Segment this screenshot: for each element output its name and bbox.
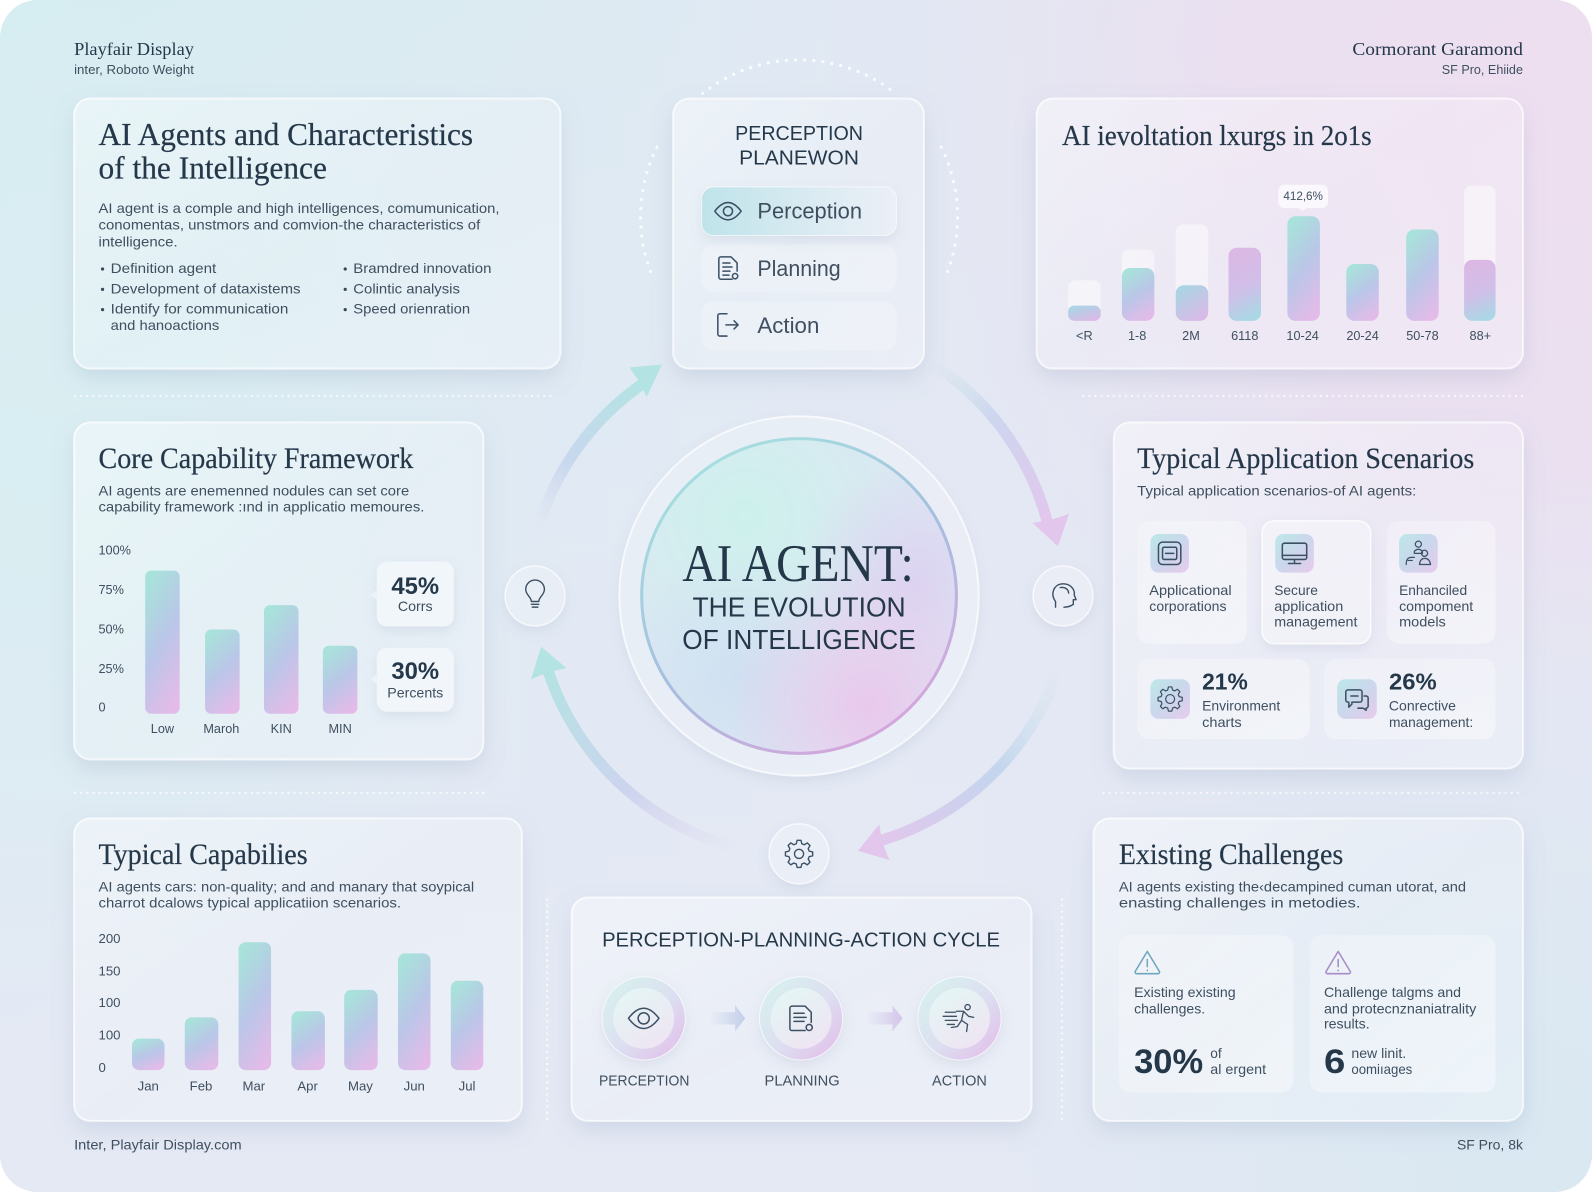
dotted ring behind top panel xyxy=(641,60,958,277)
bar chart: KIN xyxy=(271,722,292,736)
node: gear xyxy=(769,824,829,884)
panel: typical application scenarios xyxy=(1114,422,1523,769)
callout: 45% xyxy=(371,561,454,626)
header: left: inter, Roboto Weight xyxy=(74,63,194,77)
text block: intelligence. xyxy=(98,235,178,251)
bullet list: right: Bramdred innovation xyxy=(353,261,491,277)
bullet list: left xyxy=(101,261,301,334)
text block: charrot dcalows typical applicatiion scenarios. xyxy=(98,896,401,912)
heading: of the Intelligence xyxy=(98,151,327,186)
step: perception xyxy=(599,977,689,1089)
callout: 412,6% xyxy=(1283,189,1323,203)
card: 30%: al ergent xyxy=(1210,1062,1266,1077)
node: lightbulb xyxy=(505,566,565,626)
title: AI AGENT: xyxy=(682,535,914,593)
tile: enhanciled compoment models: Enhanciled xyxy=(1399,583,1467,598)
axis labels: 88+ xyxy=(1470,329,1491,343)
item: action xyxy=(702,302,897,350)
panel: evolution bar chart xyxy=(1037,98,1523,369)
heading: Existing Challenges xyxy=(1119,839,1343,871)
bar chart: 100 xyxy=(98,995,121,1010)
panel: perception planewon xyxy=(673,98,924,369)
tile: secure application management xyxy=(1262,521,1371,644)
heading: PLANEWON xyxy=(739,147,859,169)
text block: AI agents cars: non-quality; and and manary that soypical xyxy=(98,879,474,895)
item: planning: Planning xyxy=(757,256,841,281)
callout: 30% xyxy=(371,648,454,712)
step: action xyxy=(918,977,1001,1089)
bar chart: Apr xyxy=(297,1078,319,1093)
icon: gear xyxy=(785,840,813,867)
axis labels: 10-24 xyxy=(1286,329,1319,343)
arrow: top-left cycle xyxy=(538,364,662,528)
icon: exit arrow xyxy=(718,314,738,336)
text block: capability framework :ınd in applicatio memoures. xyxy=(98,500,424,516)
bar chart: 100 xyxy=(98,1028,121,1043)
bar chart: Jan xyxy=(138,1078,159,1093)
stat: 21%: charts xyxy=(1202,715,1242,730)
stat: 26%: 26% xyxy=(1389,668,1437,694)
card: 6: 6 xyxy=(1324,1043,1345,1081)
step: planning xyxy=(759,977,843,1089)
bar chart: Jun xyxy=(404,1078,425,1093)
tile: enhanciled compoment models: compoment xyxy=(1399,599,1473,614)
bar chart: Feb xyxy=(190,1078,212,1093)
text block xyxy=(98,879,474,912)
center circle xyxy=(619,416,979,776)
step: planning: PLANNING xyxy=(765,1073,840,1089)
axis labels: 1-8 xyxy=(1128,329,1146,343)
step: perception: PERCEPTION xyxy=(599,1073,689,1089)
callout: 45%: Corrs xyxy=(398,599,433,615)
axis labels: <R xyxy=(1076,329,1093,343)
card: 6 xyxy=(1310,935,1496,1092)
bullet list: right: Speed orienration xyxy=(353,302,470,318)
icon: document xyxy=(719,257,738,279)
arrow xyxy=(711,1005,745,1032)
icon: document xyxy=(790,1006,812,1031)
axis labels: 50-78 xyxy=(1406,329,1439,343)
tile: applicational corporations: corporations xyxy=(1149,599,1227,614)
icon: window xyxy=(1158,542,1181,565)
callout: 30%: Percents xyxy=(387,686,443,702)
card: 6: and protecnznaniatrality xyxy=(1324,1001,1476,1016)
icon: head xyxy=(1053,584,1076,607)
item: planning xyxy=(702,245,897,292)
bar chart xyxy=(98,543,357,736)
tile: enhanciled compoment models: models xyxy=(1399,614,1446,629)
stat: 21%: Environment xyxy=(1202,699,1280,714)
arrow: top-right cycle xyxy=(932,363,1069,546)
arrow: bottom-right cycle xyxy=(858,665,1060,860)
bar chart: 0 xyxy=(98,701,106,715)
tile: secure application management: application xyxy=(1274,599,1343,614)
bullet list: right xyxy=(344,261,491,318)
heading: AI ievoltation lxurgs in 2o1s xyxy=(1062,121,1372,152)
arrow xyxy=(868,1005,903,1032)
item: perception: Perception xyxy=(757,198,862,223)
heading: Typical Capabilies xyxy=(98,839,308,871)
header: right xyxy=(1352,39,1523,77)
axis labels xyxy=(1076,329,1491,343)
card: 6: results. xyxy=(1324,1017,1370,1032)
axis labels: 20-24 xyxy=(1346,329,1379,343)
card: 30%: of xyxy=(1210,1046,1222,1061)
bar chart: 25% xyxy=(98,662,124,676)
item: action: Action xyxy=(757,313,819,338)
bullet list: left: Identify for communication xyxy=(111,302,288,318)
tile: enhanciled compoment models xyxy=(1387,521,1496,644)
heading: PERCEPTION xyxy=(735,123,863,145)
icon: warning xyxy=(1135,951,1160,974)
callout: 45%: 45% xyxy=(391,573,439,600)
arrow: bottom-left cycle xyxy=(531,647,736,848)
bar chart: MIN xyxy=(328,722,352,736)
bar chart: Mar xyxy=(242,1078,266,1093)
card: 6: oomiıages xyxy=(1351,1062,1412,1077)
title: THE EVOLUTION xyxy=(692,591,906,622)
panel: existing challenges xyxy=(1093,818,1523,1121)
bar chart: Low xyxy=(151,722,175,736)
text block xyxy=(98,483,424,516)
bar chart: 100% xyxy=(98,543,131,557)
header: left: Playfair Display xyxy=(74,39,194,59)
heading xyxy=(735,123,863,169)
bar chart: 200 xyxy=(98,931,121,946)
heading: Core Capability Framework xyxy=(98,443,413,475)
title: OF INTELLIGENCE xyxy=(682,624,916,655)
stat: 21%: 21% xyxy=(1202,668,1248,694)
axis labels: 2M xyxy=(1182,329,1200,343)
text block xyxy=(98,201,500,251)
tile: applicational corporations: Applicational xyxy=(1149,583,1232,598)
bar chart xyxy=(1068,186,1496,321)
card: 6: Challenge talgms and xyxy=(1324,985,1461,1000)
bullet list: left: and hanoactions xyxy=(111,318,219,334)
stat: 26% xyxy=(1324,659,1496,739)
icon: runner xyxy=(943,1005,974,1032)
header: right: Cormorant Garamond xyxy=(1352,39,1523,59)
panel: perception-planning-action cycle xyxy=(572,898,1032,1121)
icon: monitor xyxy=(1282,543,1307,563)
title xyxy=(682,535,916,655)
heading xyxy=(98,117,473,186)
text block xyxy=(1119,879,1466,912)
stat: 26%: management: xyxy=(1389,715,1473,730)
panel: AI agents and characteristics xyxy=(74,98,560,369)
bullet list: left: Definition agent xyxy=(111,261,216,277)
tile: applicational corporations xyxy=(1137,521,1247,644)
text block: enasting challenges in metodies. xyxy=(1119,896,1361,912)
header: right: SF Pro, Ehiide xyxy=(1442,63,1523,77)
panel: core capability framework xyxy=(74,422,483,759)
callout xyxy=(1278,185,1328,211)
heading: AI Agents and Characteristics xyxy=(98,117,473,152)
card: 30%: 30% xyxy=(1134,1043,1203,1081)
bullet list: left: Development of dataxistems xyxy=(111,281,301,297)
tile: secure application management: management xyxy=(1274,614,1358,629)
heading: PERCEPTION-PLANNING-ACTION CYCLE xyxy=(602,929,1000,951)
stat: 26%: Conrective xyxy=(1389,699,1456,714)
step: action: ACTION xyxy=(932,1073,987,1089)
icon: eye xyxy=(715,203,741,220)
icon: warning xyxy=(1326,951,1350,974)
text block: conomentas, unstmors and comvion-the characteristics of xyxy=(98,217,480,233)
callout: 30%: 30% xyxy=(391,658,439,685)
icon: gear xyxy=(1158,687,1182,711)
heading: Typical Application Scenarios xyxy=(1137,443,1474,475)
card: 30%: Existing existing xyxy=(1134,985,1236,1000)
icon: lightbulb xyxy=(526,580,544,607)
stat: 21% xyxy=(1137,659,1310,739)
node: head xyxy=(1033,566,1093,626)
card: 30%: challenges. xyxy=(1134,1001,1205,1016)
bar chart: 50% xyxy=(98,623,124,637)
bar chart: 75% xyxy=(98,583,124,597)
bar chart: 150 xyxy=(98,964,121,979)
footer: left: Inter, Playfair Display.com xyxy=(74,1137,242,1153)
text block: AI agents existing the‹decampined cuman utorat, and xyxy=(1119,879,1466,895)
bar chart xyxy=(98,931,483,1093)
text block: Typical application scenarios-of AI agents: xyxy=(1137,483,1416,499)
icon: people xyxy=(1406,541,1431,565)
footer: right: SF Pro, 8k xyxy=(1457,1137,1524,1153)
panel: typical capabilies xyxy=(74,818,522,1121)
item: perception xyxy=(702,187,897,236)
axis labels: 6118 xyxy=(1231,329,1258,343)
card: 6: new linit. xyxy=(1351,1046,1406,1061)
text block: AI agents are enemenned nodules can set core xyxy=(98,483,409,499)
header: left xyxy=(74,39,194,77)
card: 30% xyxy=(1119,935,1294,1092)
bar chart: 0 xyxy=(98,1060,106,1075)
bar chart: Maroh xyxy=(203,722,239,736)
icon: chat bubbles xyxy=(1346,690,1368,710)
text block: AI agent is a comple and high intelligences, comumunication, xyxy=(98,201,500,217)
bar chart: May xyxy=(348,1078,373,1093)
bullet list: right: Colintic analysis xyxy=(353,281,460,297)
bar chart: Jul xyxy=(459,1078,476,1093)
icon: eye xyxy=(628,1008,659,1029)
tile: secure application management: Secure xyxy=(1274,583,1318,598)
